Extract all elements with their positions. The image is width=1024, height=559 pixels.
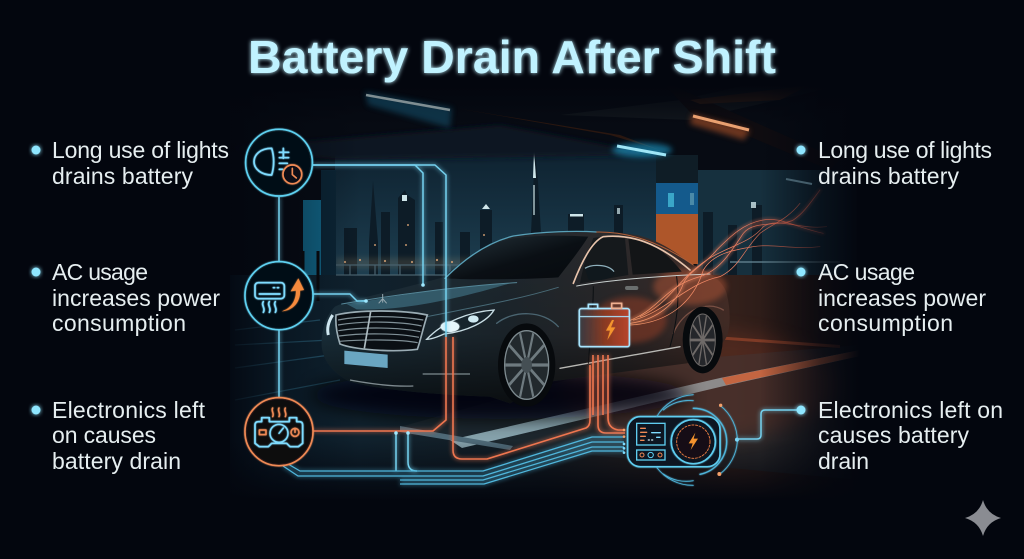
connector lines [279, 165, 625, 484]
pillars [303, 155, 698, 300]
icon: headlight with clock [246, 129, 312, 196]
rear wheel [683, 307, 723, 373]
lower intake [350, 374, 470, 386]
right bullet: AC: increases power [818, 285, 986, 311]
right bullet: electronics: causes battery [818, 422, 970, 448]
car body [322, 231, 730, 403]
front wheel [498, 323, 555, 407]
door handle [625, 286, 638, 290]
icon: sparkle watermark [965, 500, 1001, 536]
right bullet: AC: consumption [818, 310, 953, 336]
body shade [322, 231, 730, 403]
mirror [585, 265, 615, 280]
rear glow on body [653, 268, 727, 305]
icon: air conditioner with rising arrow [245, 262, 313, 330]
orange lines [313, 337, 625, 459]
gauge [671, 420, 715, 464]
left bullet: electronics: on causes [52, 422, 156, 448]
right bullet: AC [796, 259, 986, 336]
orange floor glow [560, 330, 840, 440]
grille [336, 311, 427, 351]
side windows [580, 237, 682, 283]
left bullet: electronics: battery drain [52, 448, 181, 474]
battery icon [579, 303, 629, 347]
right bullet: AC: AC usage [818, 259, 915, 285]
blue lines from lights and AC icons [279, 165, 446, 471]
left bullet: lights: drains battery [52, 163, 194, 189]
lower blue bus lines [283, 437, 624, 484]
right bullet: lights [796, 137, 992, 189]
headlight [328, 310, 494, 339]
outer arcs [657, 395, 737, 485]
glow behind battery [593, 297, 667, 343]
icon: control module with gauge [623, 395, 739, 485]
node dots [623, 404, 739, 476]
left bullet: AC [32, 259, 220, 336]
left bullet: lights: Long use of lights [52, 137, 229, 163]
left bullet: AC: AC usage [52, 259, 148, 285]
right bullet: electronics [796, 397, 1003, 474]
number plate [344, 351, 388, 368]
windshield [445, 236, 588, 279]
roof and belt trim [342, 231, 723, 368]
ceiling lights [365, 92, 812, 184]
soft wisp haze [627, 190, 823, 323]
energy wisps [627, 190, 827, 325]
connector: module to right label [737, 410, 800, 439]
hood reflection [347, 283, 510, 310]
right bullet: lights: Long use of lights [818, 137, 992, 163]
ceiling beams [230, 80, 840, 170]
hood ornament [379, 294, 387, 303]
left bullet: AC: consumption [52, 310, 186, 336]
left bullet: electronics: Electronics left [52, 397, 206, 423]
floor [230, 275, 860, 500]
right bullet: lights: drains battery [818, 163, 960, 189]
left bullet: electronics [32, 397, 206, 474]
city view through the opening [335, 150, 857, 305]
right bullet: electronics: drain [818, 448, 869, 474]
fine wisp strands [627, 190, 827, 325]
title: Battery Drain After Shift [248, 31, 776, 83]
junction dots [364, 283, 425, 435]
right bullet: electronics: Electronics left on [818, 397, 1003, 423]
module outline and screens [628, 417, 720, 467]
icon: dashboard electronics [245, 398, 313, 466]
car shadow [310, 371, 690, 419]
screen details [640, 428, 662, 457]
left bullet: AC: increases power [52, 285, 220, 311]
left bullet: lights [32, 137, 229, 189]
railing [303, 251, 840, 301]
car (drawn in 3x coordinates) [322, 190, 827, 407]
